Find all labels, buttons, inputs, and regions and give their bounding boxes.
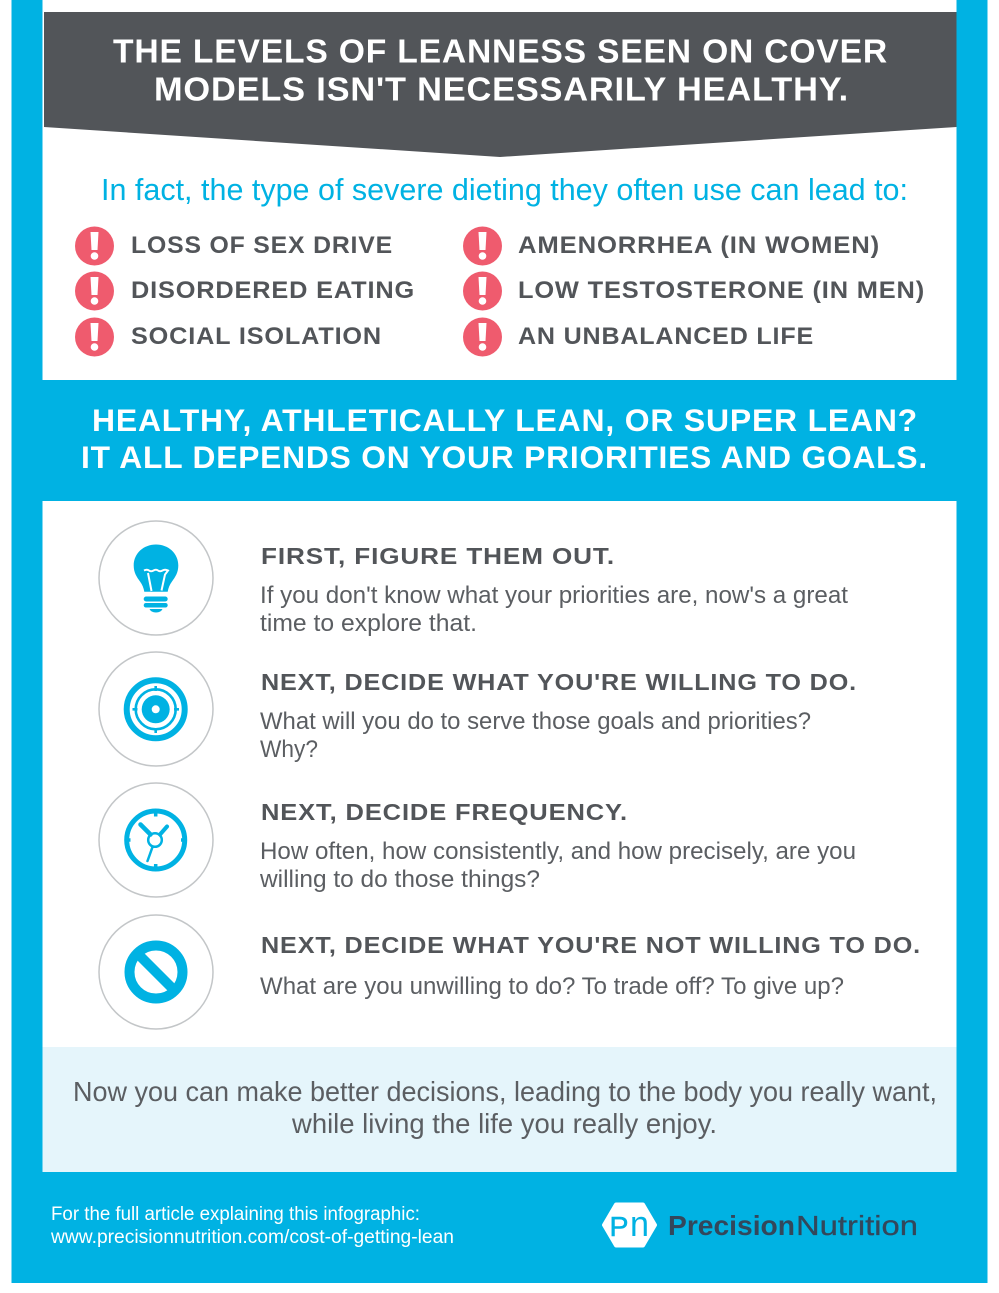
logo: Precision Nutrition — [604, 1203, 918, 1246]
icon: clock — [99, 783, 213, 897]
logo: Precision Nutrition: P — [610, 1211, 628, 1242]
step 2 text: What will you do to serve those goals and priorities? — [260, 708, 811, 735]
step 4 text — [260, 932, 921, 1000]
icon: target — [99, 652, 213, 766]
step 3 text — [259, 799, 856, 893]
list item: AMENORRHEA (IN WOMEN) — [518, 232, 880, 259]
section heading: IT ALL DEPENDS ON YOUR PRIORITIES AND GOALS. — [81, 439, 928, 475]
section heading: HEALTHY, ATHLETICALLY LEAN, OR SUPER LEAN? — [92, 402, 918, 438]
step 1 text: time to explore that. — [260, 610, 477, 637]
list item: LOW TESTOSTERONE (IN MEN) — [518, 277, 925, 304]
step 1 text: FIRST, FIGURE THEM OUT. — [261, 543, 615, 569]
title banner: THE LEVELS OF LEANNESS SEEN ON COVER — [113, 34, 888, 70]
footer article link — [50, 1204, 454, 1248]
step 4 text: NEXT, DECIDE WHAT YOU'RE NOT WILLING TO DO. — [261, 932, 921, 958]
list item: LOSS OF SEX DRIVE — [131, 232, 393, 259]
step 3 text: willing to do those things? — [259, 866, 540, 893]
step 2 text: NEXT, DECIDE WHAT YOU'RE WILLING TO DO. — [261, 669, 857, 695]
panel: conclusion: Now you can make better decisions, leading to the body you really want, — [73, 1076, 937, 1107]
icon: warning 2 — [75, 272, 114, 310]
icon: no symbol — [99, 915, 213, 1029]
panel: conclusion — [42, 1047, 956, 1172]
list item: DISORDERED EATING — [131, 277, 415, 304]
icon: warning 1 — [75, 226, 114, 266]
step 3 text: How often, how consistently, and how precisely, are you — [260, 838, 856, 865]
icon: warning 3 — [75, 318, 114, 356]
list item: SOCIAL ISOLATION — [131, 323, 382, 350]
footer article link: www.precisionnutrition.com/cost-of-getting-lean — [50, 1227, 454, 1248]
panel: top white panel — [42, 0, 956, 380]
list item: AN UNBALANCED LIFE — [518, 323, 814, 350]
section heading — [81, 402, 928, 475]
step 2 text — [260, 669, 857, 763]
warning list — [75, 226, 925, 356]
logo: Precision Nutrition: Precision — [668, 1210, 795, 1241]
icon: light bulb — [99, 521, 213, 635]
icon: warning 4 — [463, 226, 502, 266]
step 1 text: If you don't know what your priorities are, now's a great — [260, 582, 848, 609]
title banner: MODELS ISN'T NECESSARILY HEALTHY. — [154, 72, 849, 108]
step 3 text: NEXT, DECIDE FREQUENCY. — [261, 799, 628, 825]
logo: Precision Nutrition: n — [630, 1203, 649, 1244]
step 1 text — [260, 543, 848, 637]
logo: Precision Nutrition: Nutrition — [796, 1210, 918, 1241]
subheading: In fact, the type of severe dieting they often use can lead to: — [101, 172, 908, 207]
title banner — [44, 12, 956, 157]
step 4 text: What are you unwilling to do? To trade off? To give up? — [260, 973, 844, 1000]
footer article link: For the full article explaining this infographic: — [51, 1204, 420, 1225]
panel: steps — [42, 501, 956, 1047]
panel: conclusion: while living the life you really enjoy. — [291, 1108, 717, 1139]
icon: warning 6 — [463, 318, 502, 356]
step 2 text: Why? — [260, 736, 318, 763]
icon: warning 5 — [463, 272, 502, 310]
